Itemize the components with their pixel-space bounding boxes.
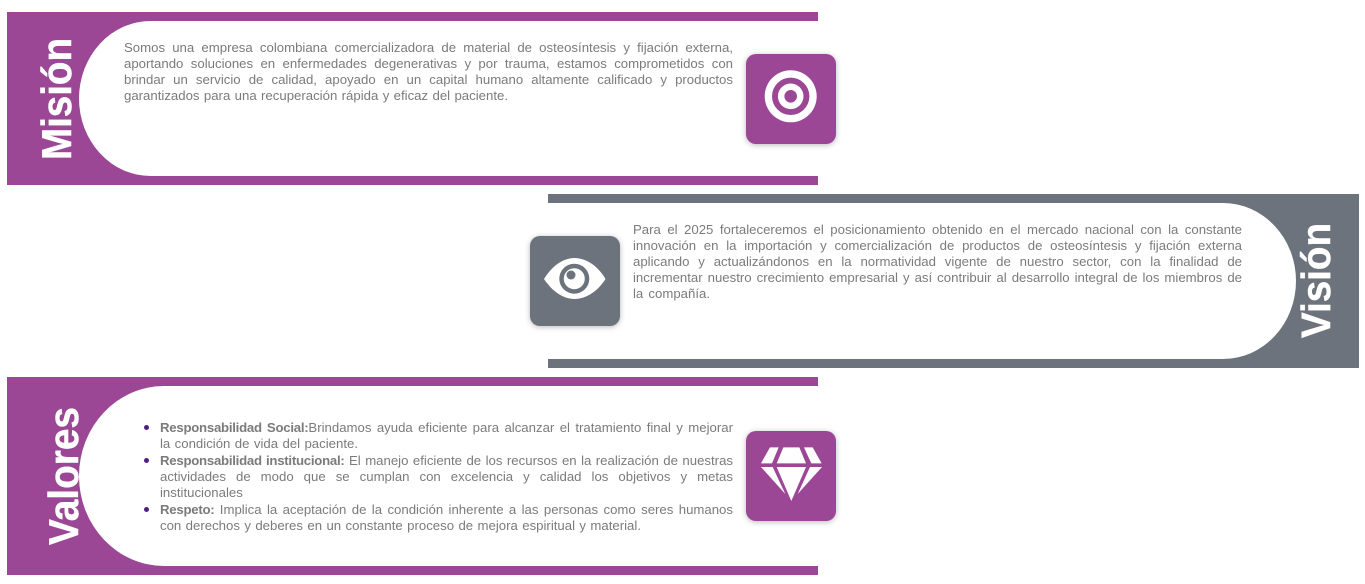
text: visión paragraph: la compañía. — [633, 286, 710, 301]
bullet: responsabilidad social — [144, 424, 148, 430]
text: visión paragraph: aplicando y actualizándonos en la normatividad vigente de nuestro sector, con la finalidad de — [633, 254, 1242, 269]
white rounded area — [79, 21, 818, 176]
panel: visión — [526, 194, 1359, 368]
bullet: respeto — [144, 507, 148, 512]
text: valores list: institucionales — [160, 485, 243, 500]
text: valores list: Respeto: Implica la aceptación de la condición inherente a las personas como seres humanos — [160, 502, 733, 517]
text: valores list — [160, 420, 733, 533]
heading: Valores: Valores — [40, 407, 87, 545]
text: valores list: con derechos y deberes en un constante proceso de mejora espiritual y material. — [160, 518, 641, 533]
text: visión paragraph — [633, 222, 1242, 301]
text: misión paragraph: garantizados para una recuperación rápida y eficaz del paciente. — [124, 88, 508, 103]
icon: diamond — [746, 431, 836, 521]
text: visión paragraph: incrementar nuestro crecimiento empresarial y así contribuir al desarrollo integral de los miembros de — [633, 270, 1242, 285]
white rounded area — [548, 203, 1296, 359]
purple band — [7, 377, 818, 575]
purple band — [7, 12, 818, 185]
icon: target — [746, 54, 836, 144]
icon: eye — [530, 236, 620, 326]
panel: valores — [7, 377, 840, 575]
text: valores list: la condición de vida del paciente. — [160, 436, 358, 451]
heading: Misión: Misión — [33, 38, 80, 160]
white rounded area — [79, 386, 818, 566]
text: visión paragraph: innovación en la importación y comercialización de productos de osteosíntesis y fijación externa — [633, 238, 1242, 253]
grey band — [548, 194, 1359, 368]
text: misión paragraph — [124, 40, 733, 103]
panel: misión — [7, 12, 840, 185]
text: misión paragraph: aportando soluciones en enfermedades degenerativas y por trauma, estamos comprometidos con — [124, 56, 733, 71]
text: valores list: Responsabilidad Social:Brindamos ayuda eficiente para alcanzar el tratamiento final y mejorar — [160, 420, 733, 435]
text: misión paragraph: brindar un servicio de calidad, apoyado en un capital humano altamente calificado y productos — [124, 72, 733, 87]
bullet: responsabilidad institucional — [144, 458, 148, 463]
text: misión paragraph: Somos una empresa colombiana comercializadora de material de osteosíntesis y fijación externa, — [124, 40, 733, 55]
text: visión paragraph: Para el 2025 fortaleceremos el posicionamiento obtenido en el mercado nacional con la constante — [633, 222, 1242, 237]
heading: Visión: Visión — [1293, 223, 1339, 338]
text: valores list: Responsabilidad institucional: El manejo eficiente de los recursos en la realización de nuestras — [160, 453, 733, 468]
text: valores list: actividades de modo que se cumplan con excelencia y calidad los objetivos y metas — [160, 469, 733, 484]
